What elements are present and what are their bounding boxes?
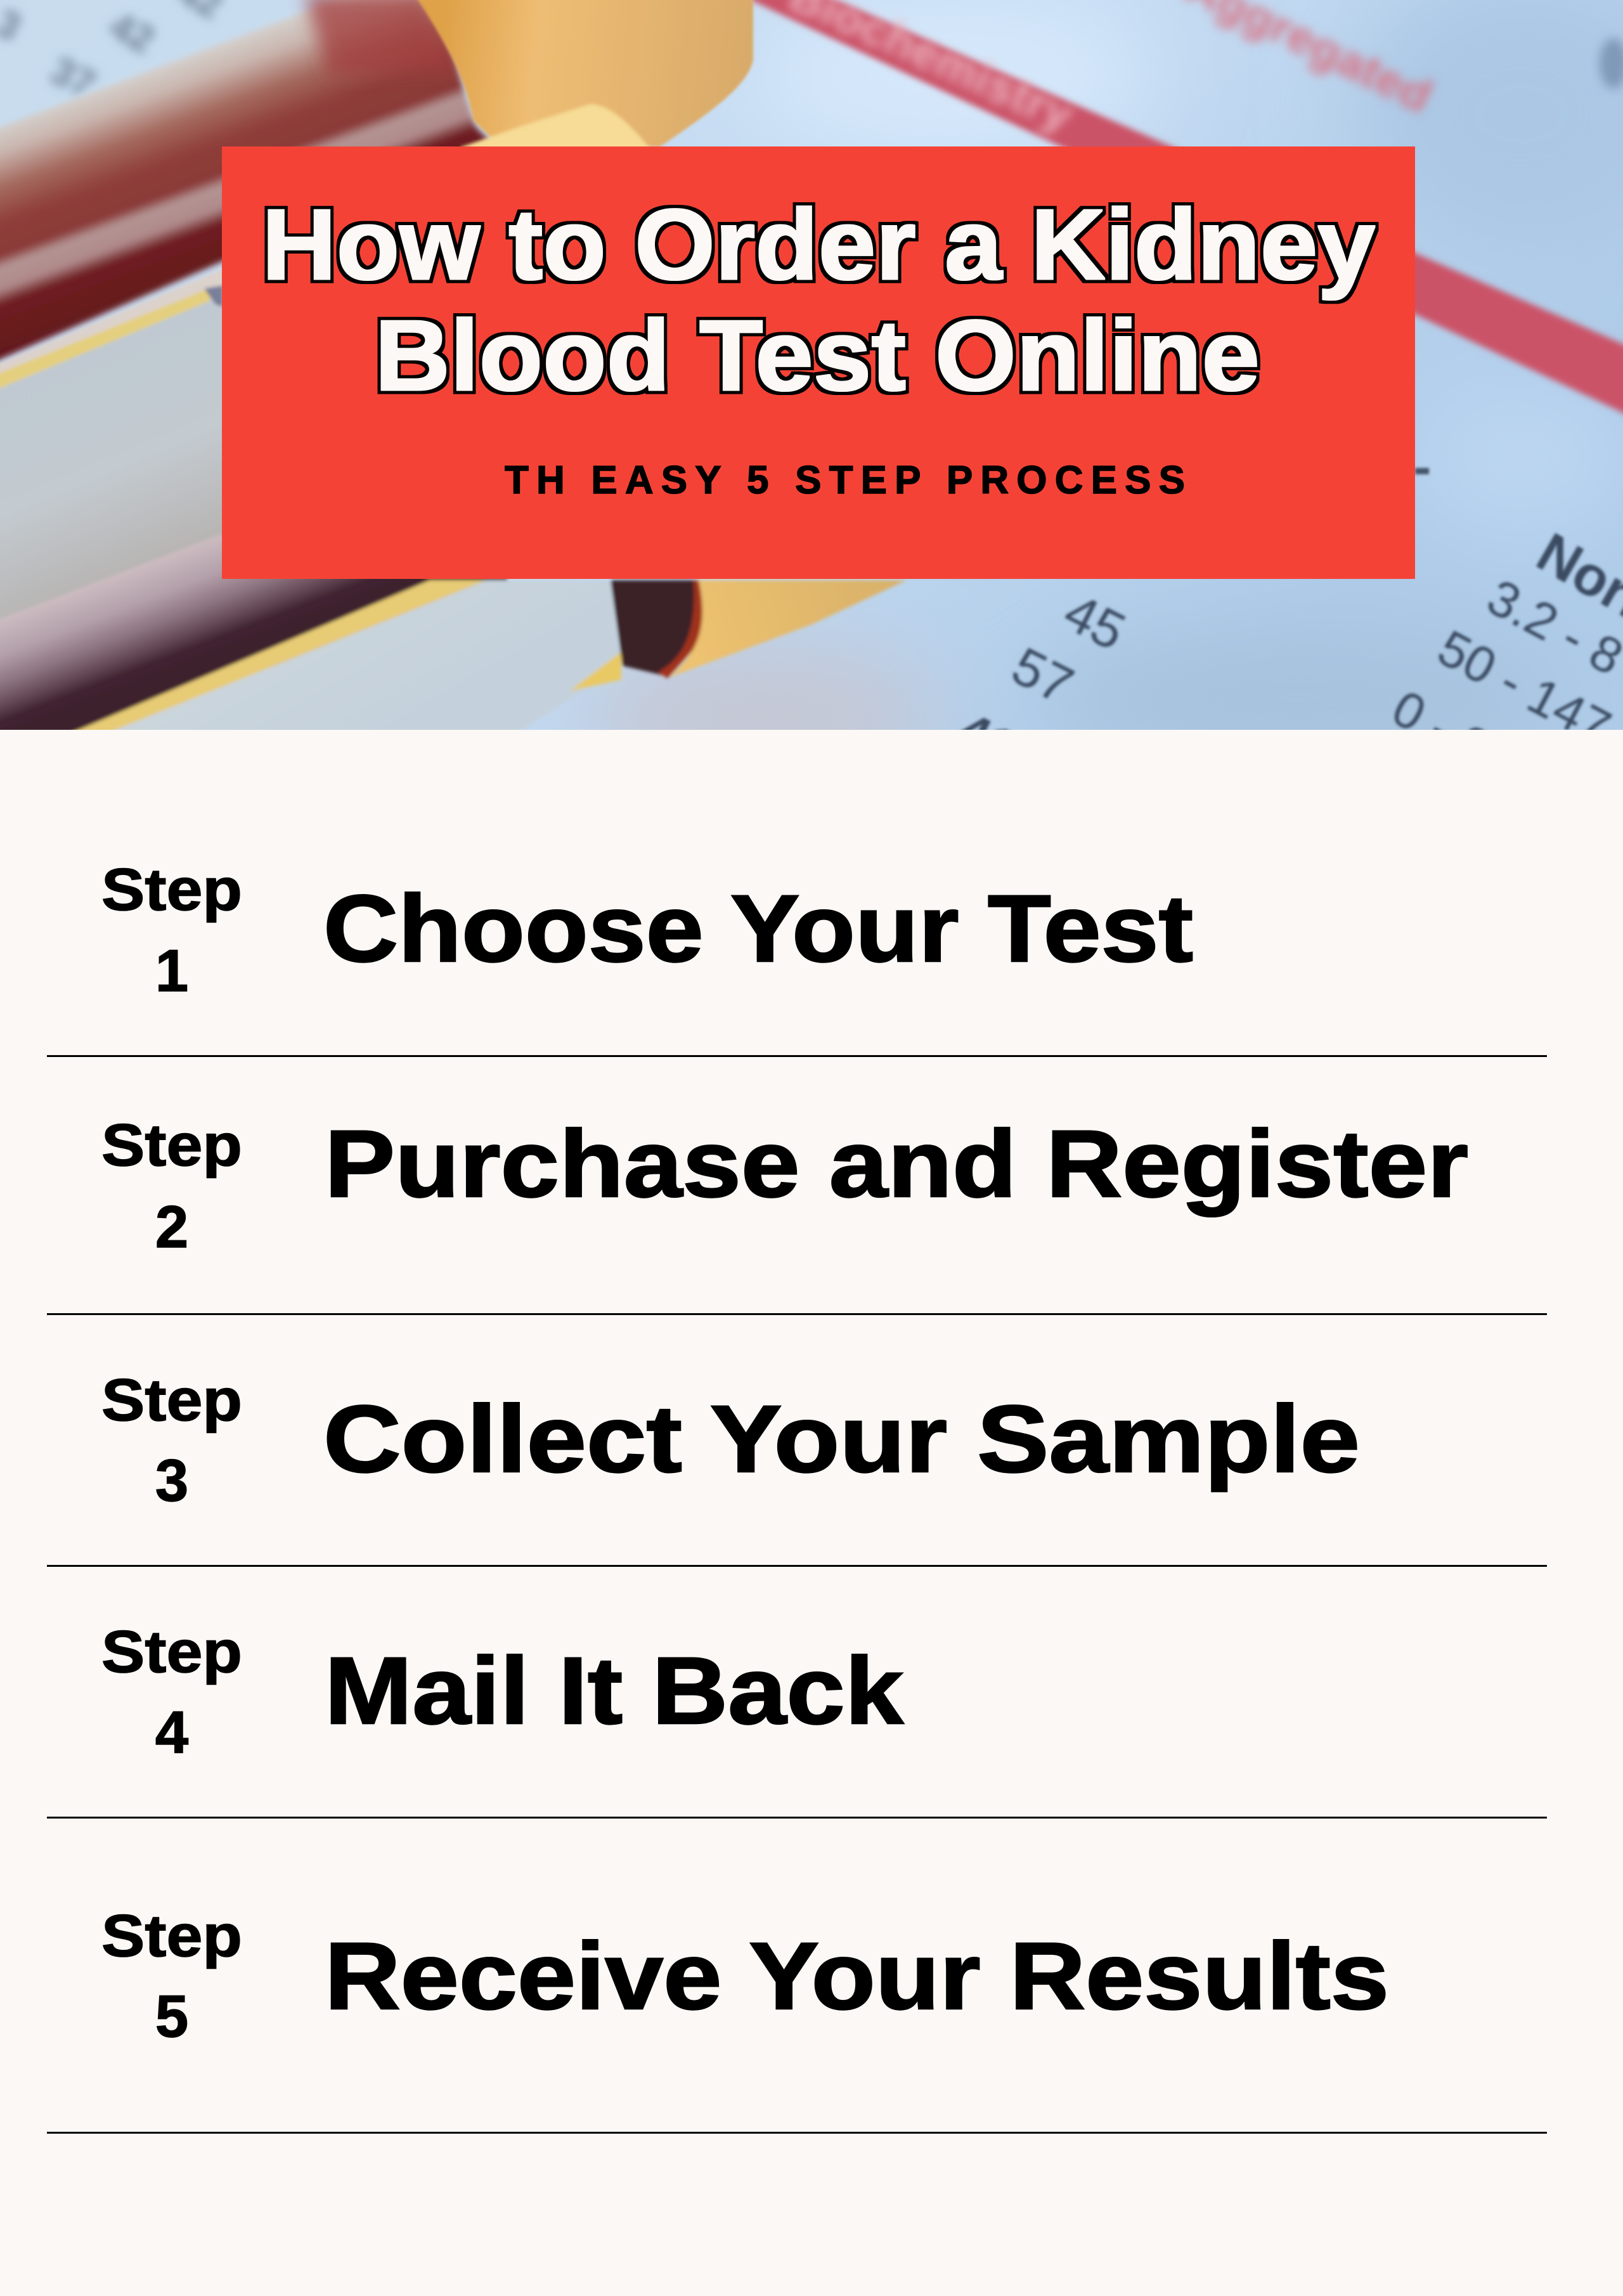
step 4 label: 4	[155, 1699, 188, 1765]
subtitle: TH EASY 5 STEP PROCESS	[505, 458, 1185, 502]
step 2 row	[101, 1110, 1468, 1260]
report figures: 0 - 30	[1383, 679, 1524, 790]
step 3 label	[101, 1366, 242, 1514]
step 1 label: 1	[155, 937, 188, 1004]
blurred numbers top left	[0, 0, 226, 96]
step 1 label	[101, 856, 242, 1004]
title banner	[222, 146, 1415, 579]
title: How to Order a Kidney	[262, 189, 1375, 301]
step 1 row	[101, 856, 1193, 1004]
step 1 label: Step	[101, 856, 242, 923]
report figures: 41	[949, 701, 1025, 777]
step 5 row	[101, 1902, 1389, 2049]
blurred numbers top left: 42	[103, 4, 161, 63]
step 3 row	[101, 1366, 1360, 1514]
step 4 row	[101, 1618, 904, 1765]
step 4 label: Step	[101, 1618, 242, 1685]
step 2 label	[101, 1112, 242, 1260]
step 2 heading: Purchase and Register	[325, 1110, 1468, 1217]
title: Blood Test Online	[375, 300, 1260, 412]
tube 2 label	[0, 266, 228, 625]
cap 1	[414, 0, 753, 147]
step 4 label	[101, 1618, 242, 1765]
blurred numbers top left: 37	[44, 48, 102, 107]
report figures: 50 - 147	[1429, 619, 1620, 756]
step 3 label: Step	[101, 1366, 242, 1433]
cap 2	[461, 104, 653, 152]
tube 3	[0, 507, 907, 739]
title	[262, 189, 1375, 412]
report figures: 45	[1055, 581, 1135, 661]
step 2 label: Step	[101, 1112, 242, 1178]
step 5 label: 5	[155, 1983, 188, 2049]
step 3 heading: Collect Your Sample	[323, 1385, 1360, 1492]
header photo: blood tubes on lab report	[0, 0, 1623, 790]
tube 1	[0, 0, 491, 368]
step 5 label	[101, 1902, 242, 2049]
step 2 label: 2	[155, 1193, 188, 1260]
step 5 heading: Receive Your Results	[325, 1923, 1389, 2029]
report figures	[960, 465, 1623, 730]
red band on report	[737, 0, 1623, 425]
step 5 label: Step	[101, 1902, 242, 1969]
step 3 label: 3	[155, 1447, 188, 1514]
step 1 heading: Choose Your Test	[323, 875, 1193, 982]
spot top right	[1600, 38, 1623, 89]
report figures: 57	[1003, 635, 1083, 715]
step 4 heading: Mail It Back	[325, 1637, 904, 1744]
